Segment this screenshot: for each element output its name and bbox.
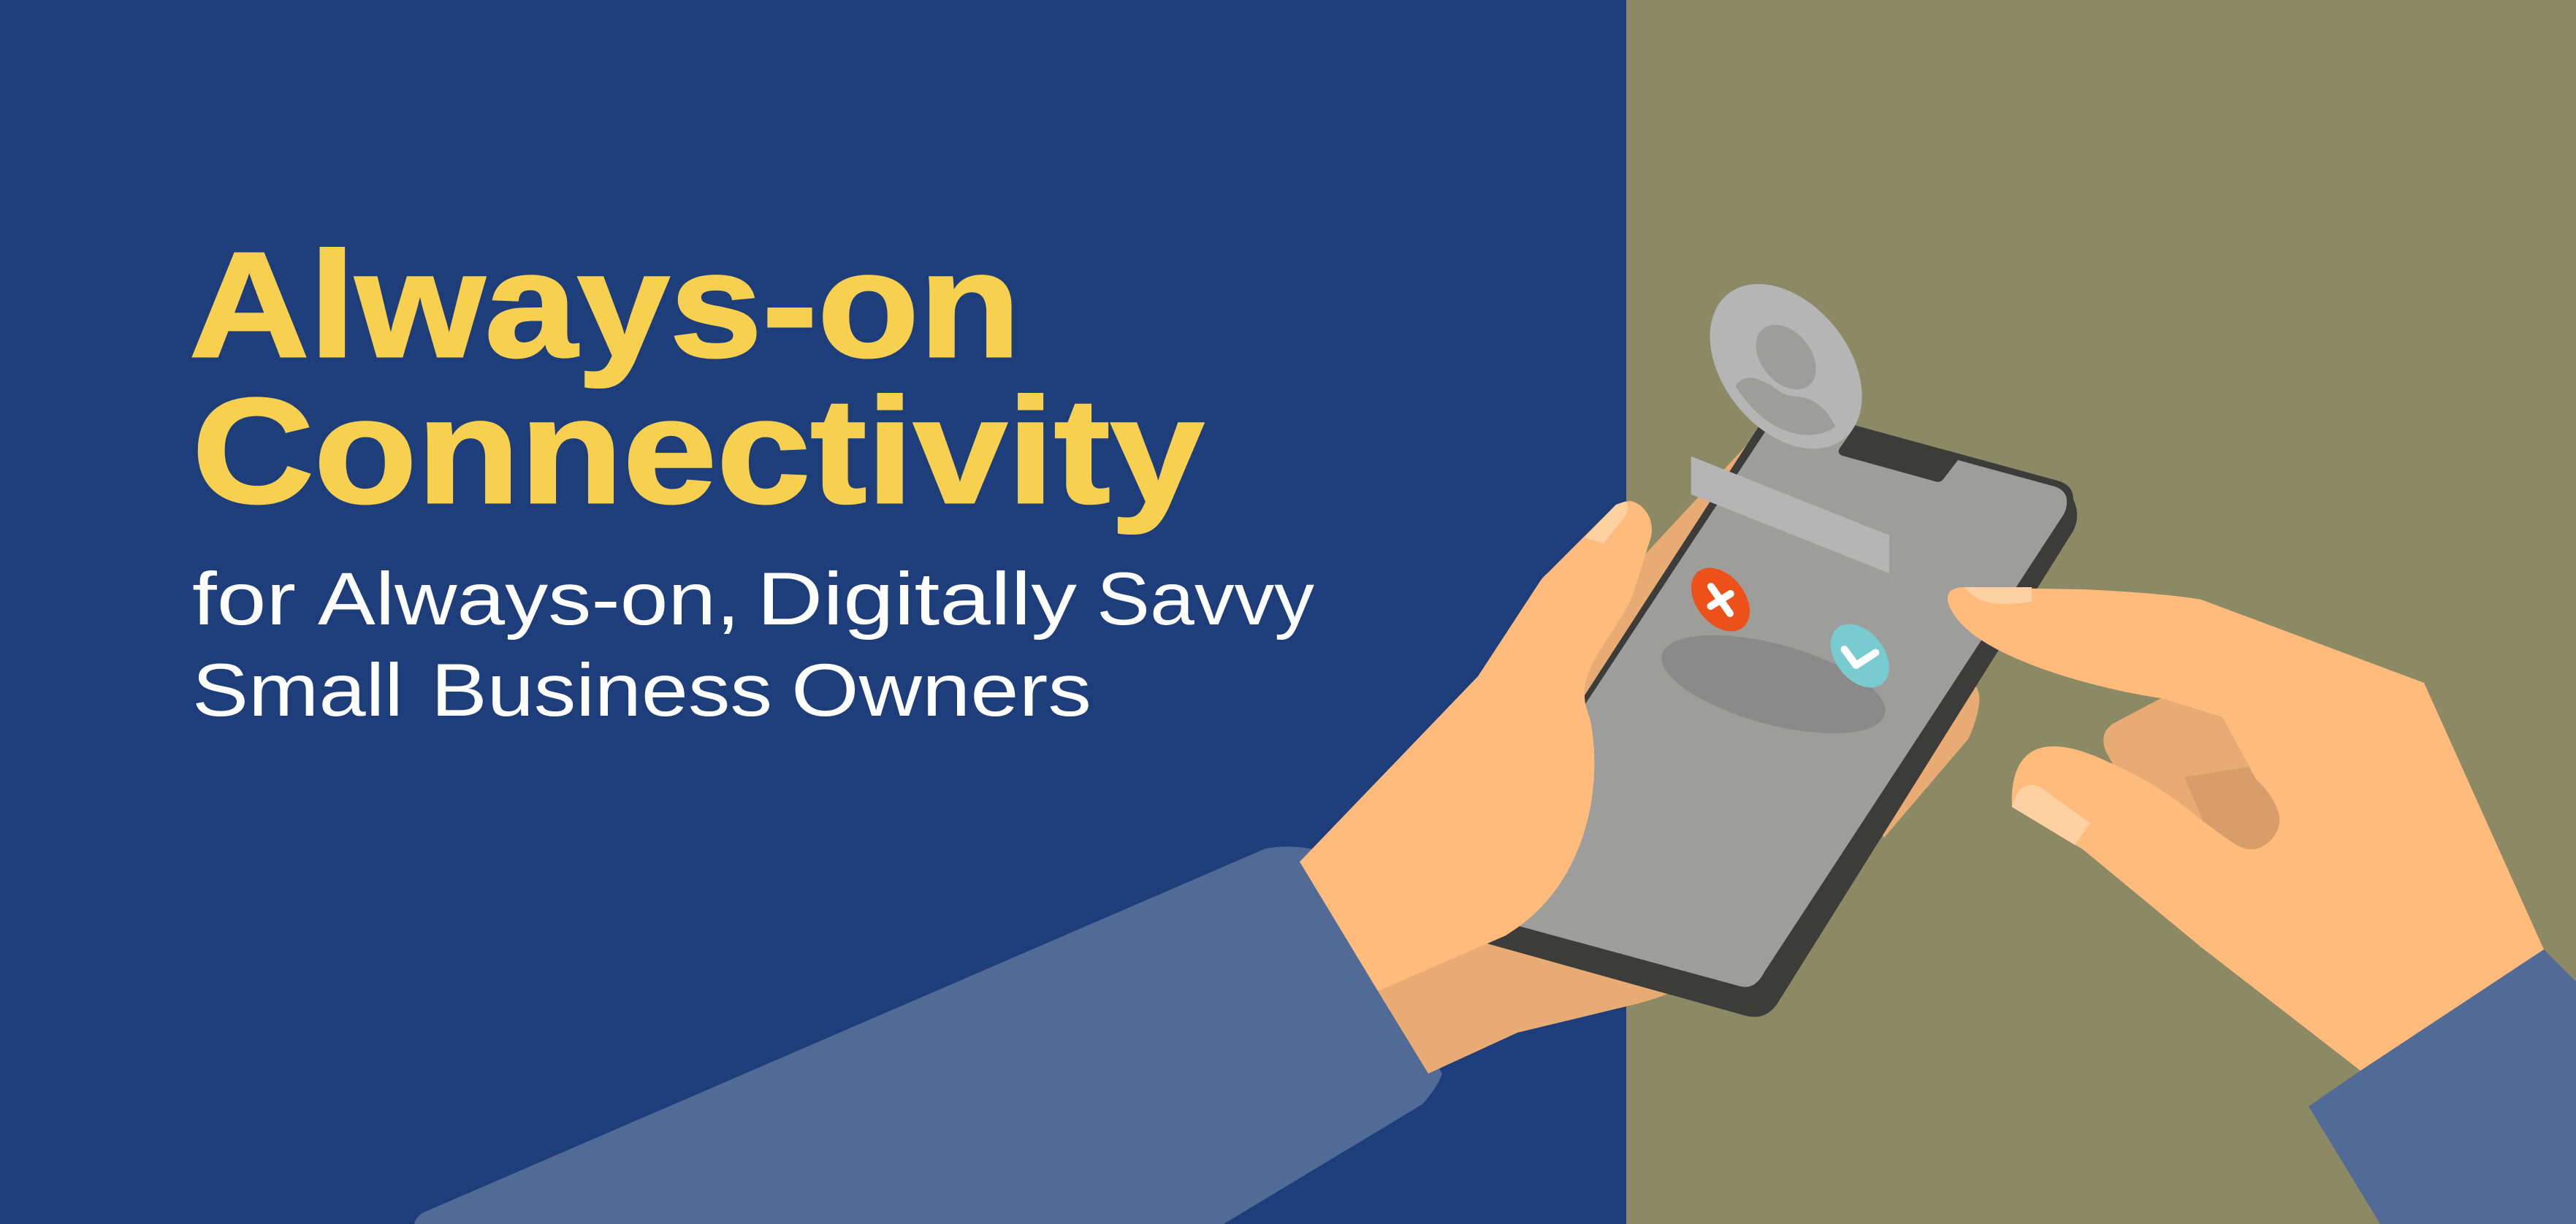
content placeholder ellipse xyxy=(1652,616,1895,753)
title: Connectivity xyxy=(192,367,1204,535)
left hand xyxy=(1300,501,1652,991)
subtitle: Business xyxy=(431,649,772,732)
decline button xyxy=(1680,556,1761,643)
phone screen xyxy=(1483,416,2067,987)
title xyxy=(189,221,1204,535)
avatar xyxy=(1679,255,1893,478)
background: navy panel xyxy=(0,0,1626,1224)
accept button xyxy=(1818,613,1901,699)
index fingernail xyxy=(1965,587,2032,604)
phone xyxy=(1461,255,2077,1017)
right hand middle finger shading xyxy=(2103,698,2279,849)
right hand xyxy=(1948,587,2544,1071)
subtitle: Always-on, xyxy=(318,557,740,640)
subtitle: Owners xyxy=(791,649,1091,732)
subtitle: Small xyxy=(192,649,403,732)
subtitle: Digitally xyxy=(757,557,1077,640)
left hand back shading xyxy=(1378,443,1980,1074)
left sleeve xyxy=(414,846,1442,1224)
thumb fingernail xyxy=(2012,784,2090,845)
thumb nail xyxy=(1585,502,1628,543)
name bar xyxy=(1691,456,1889,573)
phone body xyxy=(1461,403,2077,1017)
right sleeve xyxy=(2309,949,2576,1224)
subtitle: for xyxy=(192,557,296,640)
subtitle xyxy=(192,557,1314,732)
subtitle: Savvy xyxy=(1097,557,1314,640)
title: Always-on xyxy=(189,221,1021,389)
